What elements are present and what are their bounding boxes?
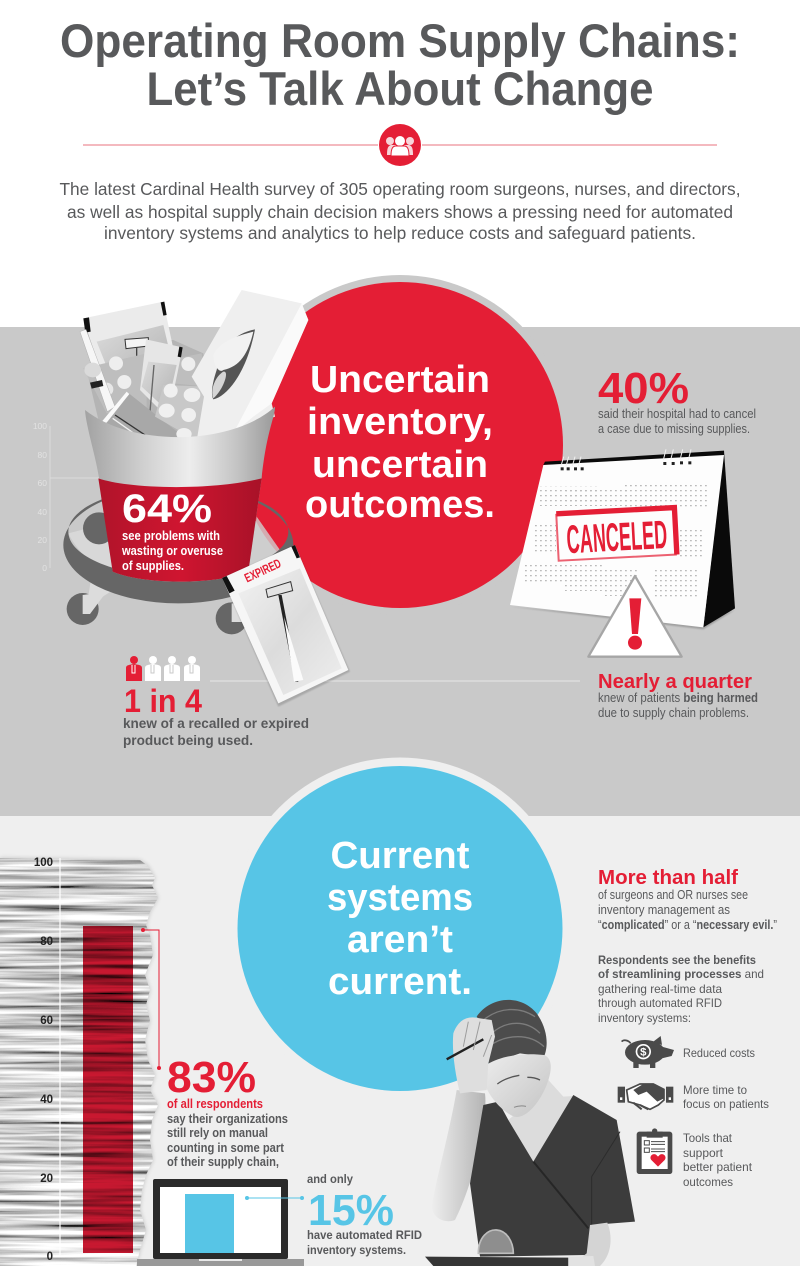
benefit: reduced costs	[622, 1036, 755, 1068]
hand and pen	[447, 1017, 495, 1093]
bucket chart axis: 60	[38, 478, 47, 488]
icon: people on divider	[83, 124, 717, 166]
stat: 83 percent: say their organizations	[167, 1112, 288, 1126]
text: respondents see benefits: Respondents see the benefits	[598, 953, 756, 967]
axis labels: 80	[40, 936, 53, 948]
stat: 40 percent: said their hospital had to cancel	[598, 407, 756, 421]
stat: 83 percent: of all respondents	[167, 1097, 263, 1111]
text: respondents see benefits	[598, 953, 764, 1025]
icon: handshake	[618, 1084, 673, 1109]
bucket on wheeled stand	[63, 290, 308, 634]
face	[486, 1054, 551, 1117]
forearm right	[570, 1223, 611, 1266]
stat: nearly a quarter: knew of patients being harmed	[598, 691, 758, 705]
axis labels: 60	[40, 1015, 53, 1027]
text: respondents see benefits: gathering real-time data	[598, 982, 722, 996]
benefit: reduced costs: Reduced costs	[683, 1046, 755, 1060]
axis labels: 0	[47, 1251, 53, 1263]
heading circle: uncertain inventory	[237, 282, 563, 608]
panel: current systems	[0, 758, 800, 1266]
stat: more than half: “complicated” or a “necessary evil.”	[598, 918, 777, 932]
bucket chart axis: 80	[38, 450, 47, 460]
stat: 64 percent: of supplies.	[122, 559, 184, 573]
clipboard	[425, 1230, 595, 1266]
stat: more than half: of surgeons and OR nurses see	[598, 888, 748, 902]
icon: expired pouch: EXPIRED	[242, 556, 283, 585]
bucket chart axis: 0	[42, 563, 47, 573]
text: and only 15 percent: inventory systems.	[307, 1243, 406, 1257]
icon: clipboard with heart	[637, 1128, 672, 1174]
intro paragraph: inventory systems and analytics to help reduce costs and safeguard patients.	[104, 223, 696, 243]
stat: more than half: More than half	[598, 867, 738, 889]
benefit: more time: focus on patients	[683, 1097, 769, 1111]
text: and only 15 percent: and only	[307, 1174, 354, 1186]
heading circle: current systems: current.	[328, 961, 472, 1003]
bucket chart axis: 100	[33, 421, 47, 431]
icon: foil pouch	[101, 392, 188, 441]
icon: surgical pouch	[83, 302, 175, 400]
chart: paper stack bar	[0, 857, 158, 1266]
text: and only 15 percent	[307, 1174, 422, 1257]
icon: pill pack back	[83, 353, 207, 413]
icon: stressed nurse	[425, 1000, 635, 1266]
paper stack	[0, 858, 158, 1266]
icon: expired pouch	[222, 545, 350, 707]
stat: more than half: inventory management as	[598, 903, 730, 917]
title: Let’s Talk About Change	[146, 62, 654, 115]
stat: 1 in 4: 1 in 4	[124, 683, 202, 719]
stat: 40 percent	[598, 364, 756, 436]
hair	[477, 1000, 547, 1064]
connector: red bracket	[141, 928, 161, 1070]
intro paragraph: as well as hospital supply chain decision makers shows a pressing need for automated	[67, 202, 733, 222]
axis labels: 20	[40, 1173, 53, 1185]
stat: 1 in 4: product being used.	[123, 733, 253, 748]
heading circle: uncertain inventory: inventory,	[307, 401, 493, 443]
connector line	[210, 680, 580, 682]
icon: pill pack front	[155, 384, 207, 441]
stat: 64 percent	[121, 487, 223, 573]
icon: tissue box	[192, 290, 308, 441]
stat: nearly a quarter: due to supply chain problems.	[598, 706, 749, 720]
stat: 83 percent: still rely on manual	[167, 1126, 268, 1140]
benefit: tools: support	[683, 1146, 724, 1160]
intro paragraph	[60, 179, 740, 243]
benefit: more time: More time to	[683, 1083, 747, 1097]
icon: desk calendar with canceled stamp	[510, 449, 735, 657]
icon: laptop with 15 percent bar	[137, 1179, 304, 1266]
stat: 1 in 4: knew of a recalled or expired	[123, 716, 309, 731]
heading circle: current systems: aren’t	[347, 919, 453, 961]
canceled stamp	[556, 508, 677, 563]
scrub top	[470, 1095, 635, 1257]
text: respondents see benefits: of streamlining processes and	[598, 967, 764, 981]
bucket chart axis	[33, 421, 100, 573]
heading circle: current systems	[238, 766, 562, 1091]
benefit: tools: outcomes	[683, 1175, 733, 1189]
heading circle: current systems: systems	[327, 877, 473, 919]
neck and chest	[508, 1080, 573, 1163]
stat: 64 percent: wasting or overuse	[121, 544, 223, 558]
intro paragraph: The latest Cardinal Health survey of 305 operating room surgeons, nurses, and directors,	[60, 179, 740, 199]
title	[60, 14, 740, 115]
icon: stand and wheels	[63, 487, 293, 634]
icon: small pouch	[140, 339, 183, 417]
stat: 83 percent: 83%	[167, 1053, 256, 1102]
stat: 40 percent: 40%	[598, 364, 689, 413]
stat: 1 in 4	[123, 656, 309, 748]
icon: desk calendar with canceled stamp: CANCELED	[565, 513, 668, 562]
stat: 64 percent: 64%	[122, 487, 212, 531]
benefit: tools	[637, 1128, 753, 1189]
heading circle: uncertain inventory: uncertain	[312, 444, 488, 486]
bucket chart axis: 20	[38, 535, 47, 545]
stat: 83 percent: counting in some part	[167, 1141, 285, 1155]
axis labels: 100	[34, 857, 53, 869]
axis labels	[34, 857, 53, 1263]
icon: warning triangle	[588, 576, 682, 657]
stat: nearly a quarter: Nearly a quarter	[598, 671, 752, 693]
stat: 83 percent	[167, 1053, 288, 1169]
icon: piggy bank: $	[640, 1047, 647, 1059]
heading circle: current systems: Current	[330, 835, 470, 877]
benefit: tools: Tools that	[683, 1131, 733, 1145]
panel: uncertain inventory	[0, 275, 800, 816]
red bar: 83 percent	[83, 926, 133, 1253]
connector: blue line	[245, 1196, 304, 1200]
heading circle: uncertain inventory: Uncertain	[310, 359, 490, 401]
raised arm	[432, 1090, 485, 1221]
text: and only 15 percent: have automated RFID	[307, 1228, 422, 1242]
icon: syringe	[80, 329, 115, 412]
bucket chart axis: 40	[38, 507, 47, 517]
icon: four clinicians	[126, 656, 200, 681]
axis labels: 40	[40, 1094, 53, 1106]
benefit: tools: better patient	[683, 1160, 753, 1174]
text: respondents see benefits: inventory systems:	[598, 1011, 691, 1025]
stat: nearly a quarter	[598, 671, 758, 720]
bucket red band	[98, 478, 262, 582]
stat: more than half	[598, 867, 777, 932]
stat: 83 percent: of their supply chain,	[167, 1155, 279, 1169]
text: respondents see benefits: through automated RFID	[598, 996, 722, 1010]
backing shade behind supplies	[87, 340, 208, 443]
heading circle: uncertain inventory: outcomes.	[305, 484, 495, 526]
title: Operating Room Supply Chains:	[60, 14, 740, 67]
text: and only 15 percent: 15%	[308, 1186, 394, 1235]
bucket body	[85, 407, 275, 582]
stat: 40 percent: a case due to missing supplies.	[598, 422, 750, 436]
benefit: more time	[618, 1083, 769, 1111]
stat: 64 percent: see problems with	[122, 529, 220, 543]
